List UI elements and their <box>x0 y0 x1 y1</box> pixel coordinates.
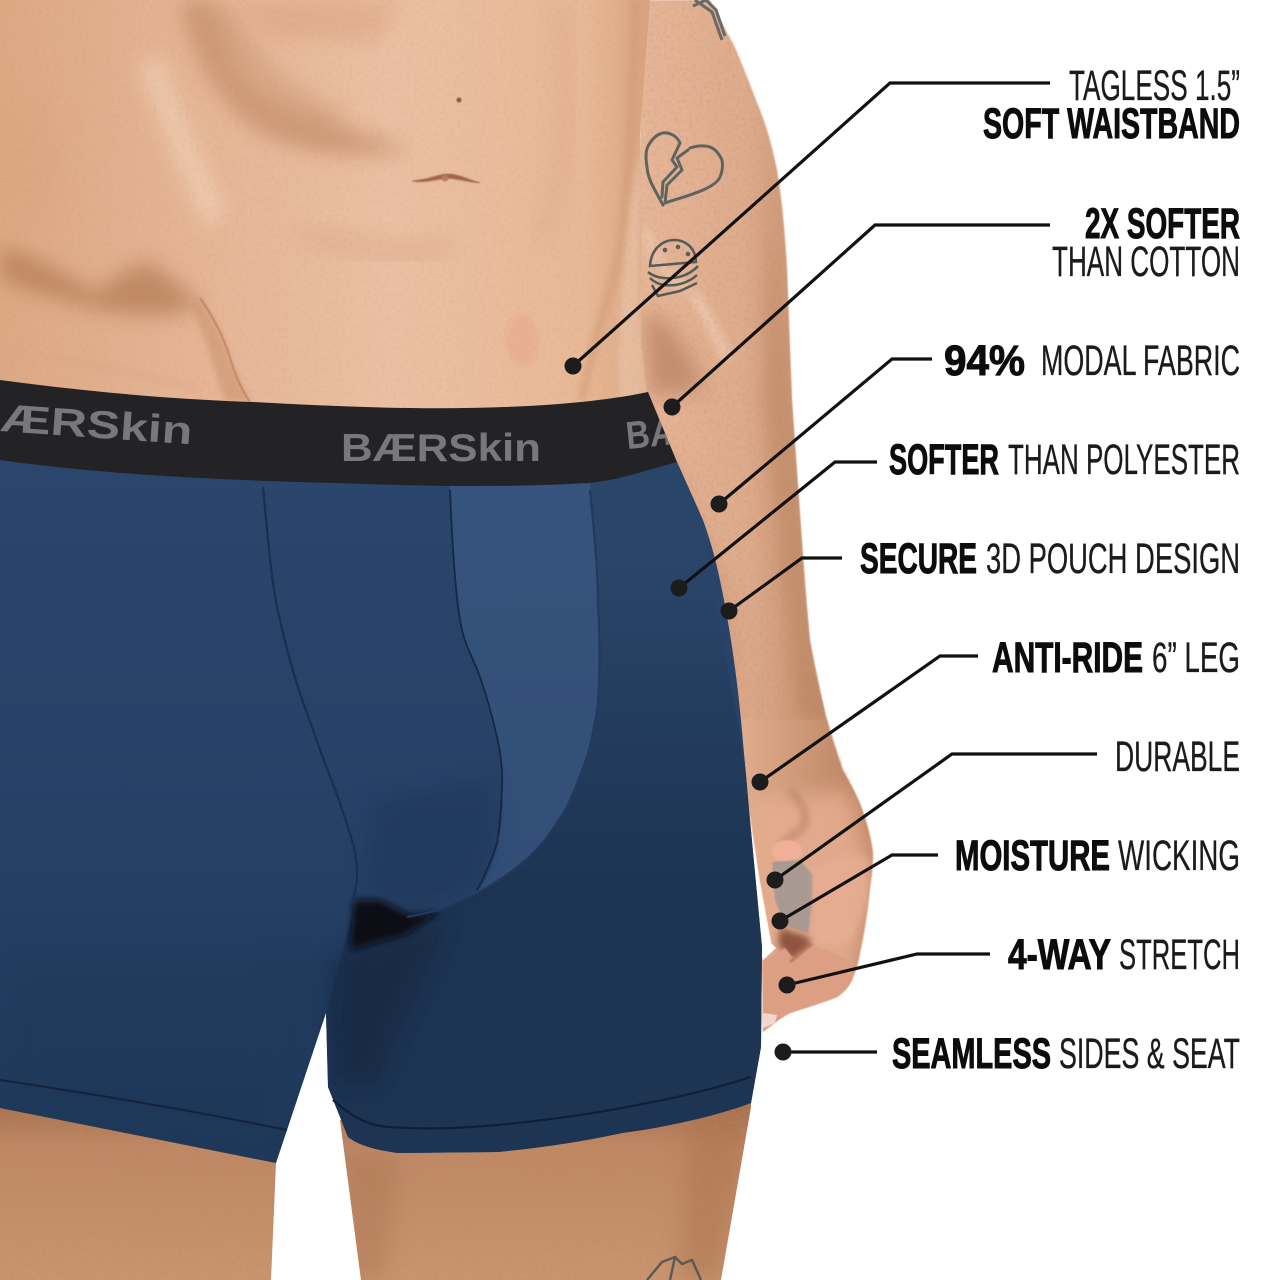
callout: seamless: SEAMLESS <box>892 1030 1051 1078</box>
tattoo: broken heart <box>646 133 723 205</box>
tattoo: thigh <box>647 1257 701 1280</box>
shorts shading <box>0 462 770 1180</box>
callout: stretch <box>778 931 1240 994</box>
mid panel shadow <box>386 800 476 866</box>
arm shading <box>640 0 857 796</box>
legs <box>0 1090 751 1280</box>
tattoo: burger <box>648 240 698 296</box>
right thigh <box>326 462 770 1160</box>
torso <box>0 0 650 420</box>
callout: seamless <box>774 1030 1240 1078</box>
inner thigh shadow <box>324 930 438 1085</box>
waistband logos: ÆRSkin <box>0 397 194 453</box>
callout: softer than polyester <box>670 436 1240 596</box>
hand <box>735 720 873 1032</box>
callout: moisture wicking: MOISTURE <box>955 832 1110 880</box>
waistband logos <box>0 405 670 462</box>
callout: waistband <box>564 62 1240 374</box>
navy shorts <box>0 450 762 1163</box>
pouch panel <box>450 480 600 893</box>
navel <box>412 174 480 183</box>
waistband <box>0 380 677 486</box>
callout: leg: ANTI-RIDE <box>992 634 1143 682</box>
callout: pouch: SECURE <box>860 535 977 583</box>
mole <box>456 98 462 102</box>
seams <box>0 487 751 1130</box>
leg shading and texture <box>0 1090 760 1280</box>
photo: model wearing navy boxer briefs <box>0 0 880 1280</box>
callout: modal fabric: 94% <box>944 337 1025 385</box>
hand details <box>750 790 875 1032</box>
callout: softer than polyester: SOFTER <box>889 436 999 484</box>
callout: leg <box>752 634 1240 790</box>
tattoo: forearm top <box>693 0 725 40</box>
callout: moisture wicking <box>772 832 1240 930</box>
callout: pouch <box>720 535 1240 620</box>
waistband logos: BÆRSkin <box>624 400 778 458</box>
crotch shadow <box>350 900 440 950</box>
callout: modal fabric <box>710 337 1240 512</box>
left leg shade <box>8 1014 326 1163</box>
arm <box>640 0 835 800</box>
callout: stretch: 4-WAY <box>1008 931 1111 979</box>
callout: softer than cotton <box>664 200 1240 416</box>
waistband logos: BÆRSkin <box>341 427 541 470</box>
finger gap <box>763 944 776 960</box>
callout: durable <box>766 733 1240 888</box>
torso shading <box>0 0 650 420</box>
